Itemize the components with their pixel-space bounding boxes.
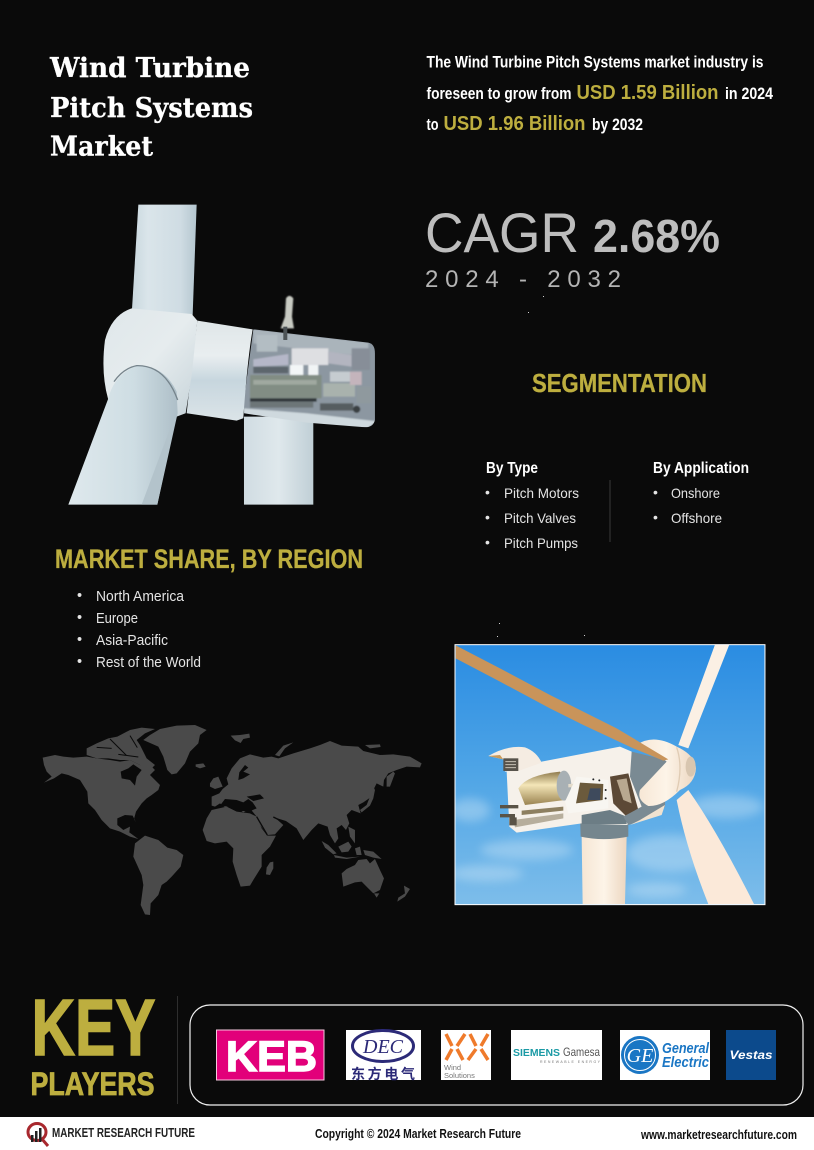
logo: KK Wind Solutions: Solutions	[444, 1071, 475, 1080]
segmentation: by application: •	[653, 484, 658, 500]
market forecast statement: in 2024	[725, 85, 774, 103]
market share heading: MARKET SHARE, BY REGION	[55, 544, 363, 574]
hub back plate	[623, 752, 667, 825]
logo: Siemens Gamesa: SIEMENS	[513, 1047, 560, 1059]
logo: General Electric	[620, 1030, 710, 1080]
region list	[77, 588, 201, 671]
title: Market	[50, 132, 153, 162]
southeast asia islands	[322, 841, 337, 854]
logo: DEC: 东方电气	[351, 1064, 415, 1084]
logo: General Electric: General	[662, 1040, 710, 1057]
region list: •	[77, 632, 82, 648]
gearbox frame	[565, 777, 608, 813]
logo: Siemens Gamesa: RENEWABLE ENERGY	[540, 1060, 601, 1064]
arctic channels	[97, 736, 138, 757]
logo: KK Wind Solutions	[441, 1030, 491, 1080]
segmentation: by type: •	[485, 534, 490, 550]
hudson bay	[121, 764, 142, 786]
segmentation: by application	[653, 460, 749, 526]
region list: •	[77, 654, 82, 670]
sensor mast	[281, 296, 294, 328]
pitched orange blade	[456, 645, 668, 761]
segmentation: by type: Pitch Motors	[504, 485, 579, 501]
region list: Rest of the World	[96, 655, 201, 671]
seas	[220, 765, 284, 835]
logo: Vestas	[726, 1030, 776, 1080]
madagascar	[266, 862, 273, 875]
market forecast statement: by 2032	[592, 116, 643, 134]
nacelle shell	[244, 330, 375, 428]
tower	[582, 837, 627, 904]
bottom gear train	[513, 813, 563, 827]
segmentation: by type: By Type	[486, 460, 538, 477]
new zealand	[397, 886, 410, 902]
novaya zemlya	[275, 742, 293, 756]
yaw machinery	[610, 773, 638, 817]
logo: Siemens Gamesa: Gamesa	[563, 1045, 600, 1059]
market forecast statement: USD 1.59 Billion	[576, 81, 718, 104]
nacelle body	[507, 747, 657, 833]
uk	[210, 777, 223, 789]
market forecast statement: foreseen to grow from	[426, 85, 572, 103]
tasmania	[374, 893, 379, 898]
segmentation: by type: Pitch Pumps	[504, 535, 578, 551]
lower blade	[68, 366, 178, 505]
tower yaw plate	[582, 810, 627, 824]
segmentation: by type	[485, 460, 579, 551]
logo: General Electric: Electric	[662, 1054, 710, 1071]
logo: KK Wind Solutions: Wind	[444, 1063, 461, 1072]
segmentation: by application: By Application	[653, 460, 749, 477]
rear blades	[678, 645, 729, 748]
CAGR figure	[425, 201, 720, 293]
market forecast statement: USD 1.96 Billion	[444, 112, 586, 135]
segmentation heading: SEGMENTATION	[532, 368, 707, 398]
arctic islands	[87, 728, 155, 770]
sakhalin	[387, 772, 395, 787]
segmentation: by application: Offshore	[671, 510, 722, 526]
region list: Asia-Pacific	[96, 633, 168, 649]
greenland	[143, 725, 207, 774]
siberian islands	[365, 744, 381, 748]
logo: KEB: KEB	[226, 1033, 317, 1081]
segmentation: by type: Pitch Valves	[504, 510, 576, 526]
sensor box	[503, 758, 518, 771]
africa	[203, 807, 276, 887]
region list: Europe	[96, 611, 138, 627]
specks	[497, 296, 585, 637]
segmentation: by type: •	[485, 509, 490, 525]
CAGR figure: 2.68%	[593, 210, 720, 262]
segmentation: by application: •	[653, 509, 658, 525]
key players heading	[30, 983, 156, 1102]
segmentation: by application: Onshore	[671, 485, 720, 501]
upper blade	[132, 205, 197, 315]
title	[49, 53, 253, 162]
generator	[518, 772, 570, 805]
logo: Siemens Gamesa	[511, 1030, 602, 1080]
eurasia	[212, 741, 422, 843]
key players panel	[190, 1005, 803, 1105]
region list: •	[77, 588, 82, 604]
hub	[103, 308, 197, 417]
south america	[133, 836, 183, 915]
world map	[43, 725, 422, 915]
logo: DEC: DEC	[362, 1036, 404, 1058]
copyright: Copyright © 2024 Market Research Future	[315, 1127, 521, 1141]
tower	[244, 417, 313, 505]
title: Pitch Systems	[50, 93, 253, 124]
rear housing	[488, 747, 542, 772]
logo: market research future: MARKET RESEARCH FUTURE	[52, 1126, 195, 1140]
japan	[360, 785, 375, 812]
market forecast statement	[426, 54, 774, 135]
logo: Vestas: Vestas	[730, 1048, 773, 1062]
australia	[342, 859, 384, 893]
title: Wind Turbine	[49, 53, 250, 84]
segmentation: by type: •	[485, 484, 490, 500]
svalbard	[231, 734, 250, 743]
region list: •	[77, 610, 82, 626]
logo: General Electric: GE	[627, 1045, 653, 1067]
iceland	[196, 763, 206, 768]
CAGR figure: CAGR	[425, 201, 579, 264]
logo: market research future	[28, 1124, 195, 1146]
frame	[455, 645, 765, 905]
market forecast statement: to	[426, 116, 438, 134]
hub collar	[187, 321, 253, 421]
north america	[43, 755, 160, 839]
logo: DEC	[346, 1030, 421, 1084]
CAGR figure: 2024 - 2032	[425, 266, 621, 293]
footer bar	[0, 1117, 814, 1150]
image: turbine nacelle on black	[68, 205, 380, 505]
key players heading: PLAYERS	[30, 1066, 154, 1102]
hub	[637, 740, 696, 806]
key players heading: KEY	[32, 983, 156, 1072]
region list: North America	[96, 589, 185, 605]
image: cutaway wind turbine on blue sky	[450, 645, 765, 905]
